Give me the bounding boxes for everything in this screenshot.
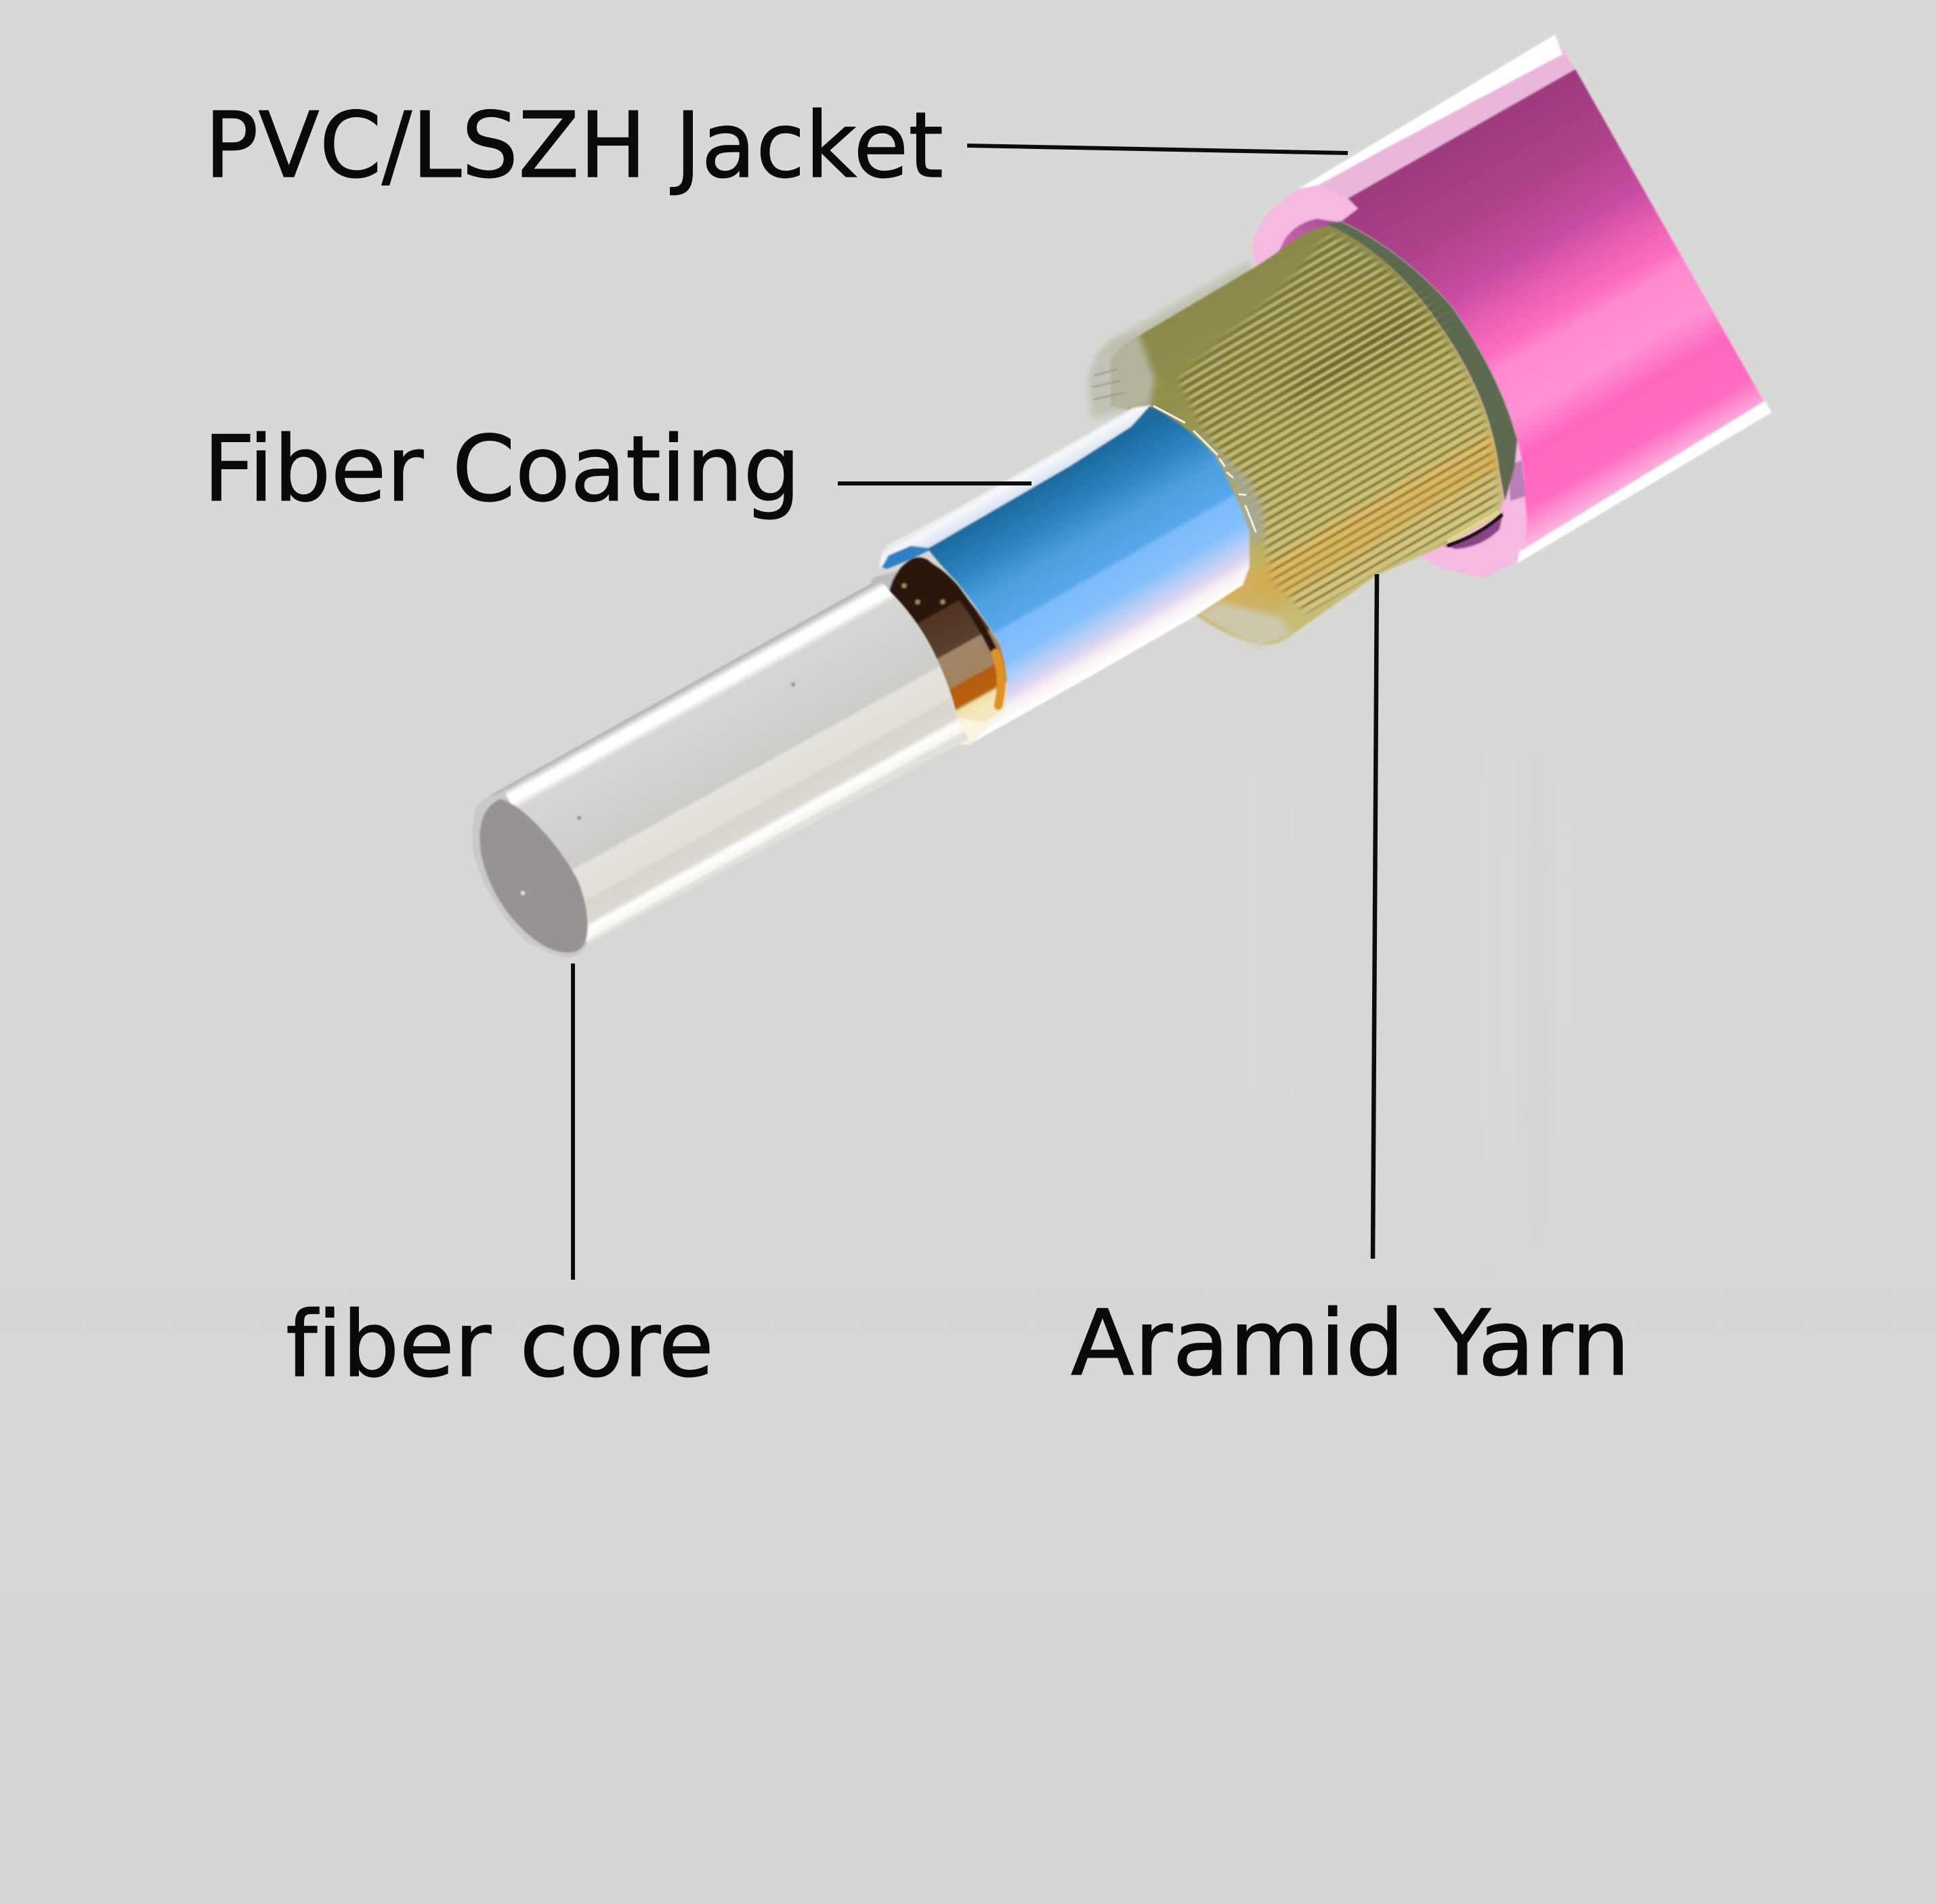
label: Aramid Yarn: Aramid Yarn (1071, 1291, 1630, 1396)
strand pattern fill (1178, 233, 1501, 615)
leader line: fiber coating (838, 481, 1031, 485)
label: fiber core: fiber core (286, 1292, 714, 1398)
jacket top white edge (1298, 35, 1562, 189)
tight buffer: amber band (870, 557, 1006, 722)
jacket lilac gap (1508, 460, 1525, 501)
fiber core: clear glass rod (472, 582, 968, 957)
yarn fuzzy fibers (1092, 369, 1124, 399)
amber band lower edge (996, 653, 1001, 706)
label: PVC/LSZH Jacket: PVC/LSZH Jacket (205, 93, 943, 198)
core orange underline (829, 743, 956, 813)
jacket: PVC/LSZH outer sheath (1252, 35, 1772, 578)
yarn dark strand zone (1283, 293, 1444, 409)
leader line: aramid yarn (1373, 574, 1377, 1259)
amber band body (889, 557, 1006, 722)
leader line: fiber core (571, 964, 575, 1280)
fiber coating: blue buffer (879, 405, 1250, 745)
yarn left fuzzy end (1088, 332, 1155, 419)
coating top white edge (879, 405, 1151, 569)
core face speck (521, 891, 525, 895)
yarn end ring (1329, 221, 1517, 501)
yarn top halo (1093, 261, 1253, 361)
jacket inner cavity top (1277, 219, 1338, 261)
amber band specks (902, 584, 945, 604)
dark zone underlay (1283, 298, 1437, 409)
yarn base (1111, 225, 1504, 645)
core specks (577, 683, 795, 820)
yarn strands (1178, 233, 1501, 615)
amber band dark edge (914, 562, 993, 649)
leader line: jacket (967, 146, 1348, 153)
jacket inner cavity bottom (1443, 511, 1504, 549)
coating frayed junction (1154, 406, 1256, 532)
yarn lower rim highlight (1447, 512, 1499, 542)
coating body (928, 406, 1250, 745)
jacket inner magenta surface (1341, 69, 1765, 550)
yarn grey transition (1194, 429, 1264, 545)
aramid yarn (1084, 203, 1558, 677)
cable illustration (472, 35, 1772, 957)
diagram: fiber optic cable structure (211, 34, 1772, 1377)
background streaks (1246, 731, 1566, 1178)
core cylinder body (490, 582, 968, 945)
label: Fiber Coating: Fiber Coating (203, 416, 801, 522)
jacket pale pink base and rim (1252, 41, 1768, 578)
jacket top strip shade (1319, 53, 1575, 198)
yarn orange sheen (1253, 450, 1498, 606)
stub light edge (870, 563, 921, 592)
jacket bottom white edge (1517, 401, 1772, 563)
dark zone strands (1280, 292, 1445, 410)
core end rim (472, 792, 587, 957)
yarn dark base shadow (1447, 515, 1502, 546)
amber band base light (945, 697, 1019, 745)
core end face (480, 799, 588, 953)
coating blue rim patch (882, 546, 933, 569)
yarn bottom fuzzy cap (1196, 601, 1292, 648)
